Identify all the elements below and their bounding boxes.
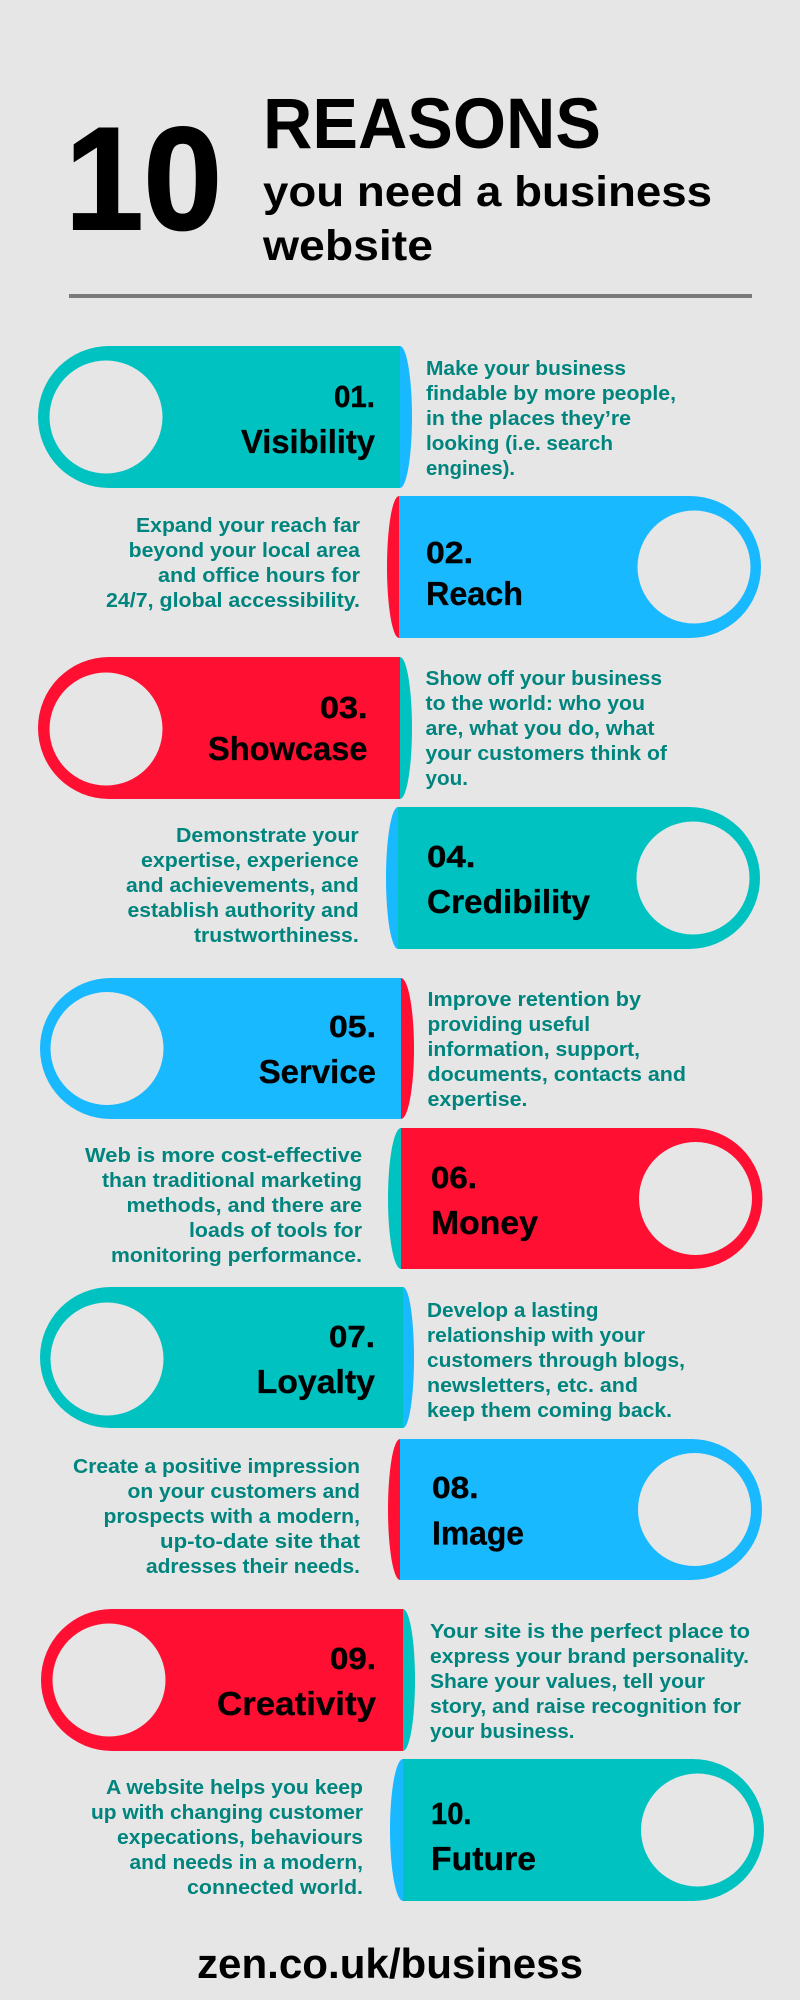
- panel: 08 Image: [388, 1439, 762, 1580]
- subheading line 2: website: [262, 223, 433, 270]
- text block: 08 description: [73, 1456, 360, 1578]
- text block: 04 description: Demonstrate your: [176, 825, 359, 847]
- text block: 10 description: connected world.: [187, 1877, 363, 1899]
- panel: 08 Image: 08.: [432, 1470, 479, 1505]
- text block: 07 description: newsletters, etc. and: [427, 1375, 638, 1397]
- panel: 06 Money: [388, 1128, 762, 1269]
- panel: 01 Visibility: [38, 346, 412, 488]
- text block: 02 description: beyond your local area: [129, 540, 361, 562]
- panel: 07 Loyalty: 07.: [329, 1319, 375, 1354]
- panel: 09 Creativity: 09.: [330, 1641, 376, 1676]
- text block: 10 description: and needs in a modern,: [130, 1852, 363, 1874]
- big number 10: 10: [65, 97, 222, 260]
- panel: 04 Credibility: [386, 807, 760, 949]
- text block: 08 description: prospects with a modern,: [104, 1506, 360, 1528]
- text block: 04 description: trustworthiness.: [194, 925, 359, 947]
- panel: 04 Credibility: 04.: [427, 839, 476, 874]
- text block: 05 description: [428, 989, 686, 1111]
- text block: 07 description: keep them coming back.: [427, 1400, 672, 1422]
- panel: 04 Credibility: Credibility: [427, 884, 590, 921]
- text block: 01 description: engines).: [426, 458, 515, 480]
- text block: 02 description: 24/7, global accessibility.: [106, 590, 360, 612]
- title block: [65, 85, 712, 270]
- panel: 09 Creativity: Creativity: [217, 1686, 376, 1723]
- heading: REASONS: REASONS: [263, 85, 601, 164]
- text block: 03 description: Show off your business: [426, 668, 662, 690]
- text block: 06 description: loads of tools for: [189, 1220, 362, 1242]
- text block: 07 description: customers through blogs,: [427, 1350, 685, 1372]
- panel: 05 Service: 05.: [329, 1009, 376, 1044]
- panel: 02 Reach: 02.: [426, 535, 473, 570]
- panel: 07 Loyalty: Loyalty: [257, 1364, 375, 1401]
- text block: 08 description: adresses their needs.: [146, 1556, 360, 1578]
- text block: 07 description: relationship with your: [427, 1325, 645, 1347]
- panel: 01 Visibility: Visibility: [241, 424, 375, 461]
- panel: 08 Image: Image: [432, 1516, 524, 1552]
- panel: 03 Showcase: 03.: [320, 690, 368, 725]
- text block: 06 description: [85, 1145, 362, 1267]
- text block: 09 description: Share your values, tell your: [430, 1671, 705, 1693]
- text block: 01 description: Make your business: [426, 358, 626, 380]
- text block: 03 description: to the world: who you: [426, 693, 645, 715]
- text block: 06 description: methods, and there are: [126, 1195, 362, 1217]
- text block: 10 description: [91, 1777, 363, 1899]
- text block: 03 description: you.: [426, 768, 468, 790]
- text block: 09 description: story, and raise recognition for: [430, 1696, 741, 1718]
- panel: 02 Reach: Reach: [426, 576, 523, 613]
- panel: 06 Money: Money: [431, 1205, 538, 1242]
- text block: 08 description: Create a positive impression: [73, 1456, 360, 1478]
- text block: 10 description: expecations, behaviours: [117, 1827, 363, 1849]
- panel: 05 Service: Service: [259, 1054, 376, 1091]
- divider rule: [69, 294, 752, 298]
- text block: 08 description: up-to-date site that: [160, 1531, 360, 1553]
- text block: 03 description: are, what you do, what: [426, 718, 655, 740]
- text block: 04 description: and achievements, and: [126, 875, 359, 897]
- panel: 09 Creativity: [41, 1609, 415, 1751]
- text block: 05 description: expertise.: [428, 1089, 528, 1111]
- panel: 03 Showcase: Showcase: [208, 731, 368, 768]
- text block: 01 description: findable by more people,: [426, 383, 676, 405]
- text block: 07 description: [427, 1300, 685, 1422]
- text block: 10 description: up with changing customer: [91, 1802, 363, 1824]
- panel: 02 Reach: [387, 496, 761, 638]
- text block: 09 description: [430, 1621, 750, 1743]
- text block: 02 description: and office hours for: [158, 565, 360, 587]
- panel: 05 Service: [40, 978, 414, 1119]
- text block: 04 description: [126, 825, 359, 947]
- panel: 07 Loyalty: [40, 1287, 414, 1428]
- text block: 04 description: establish authority and: [128, 900, 359, 922]
- text block: 05 description: documents, contacts and: [428, 1064, 686, 1086]
- text block: 05 description: providing useful: [428, 1014, 590, 1036]
- text block: 10 description: A website helps you keep: [106, 1777, 363, 1799]
- subheading line 1: you need a business: [263, 169, 712, 216]
- text block: 06 description: than traditional marketing: [102, 1170, 362, 1192]
- text block: 07 description: Develop a lasting: [427, 1300, 598, 1322]
- text block: 05 description: Improve retention by: [428, 989, 642, 1011]
- text block: 03 description: your customers think of: [426, 743, 667, 765]
- text block: 06 description: Web is more cost-effective: [85, 1145, 362, 1167]
- text block: 01 description: in the places they’re: [426, 408, 631, 430]
- text block: 09 description: express your brand personality.: [430, 1646, 749, 1668]
- text block: 04 description: expertise, experience: [141, 850, 359, 872]
- footer URL: zen.co.uk/business: [197, 1940, 583, 1987]
- text block: 08 description: on your customers and: [128, 1481, 360, 1503]
- panel: 06 Money: 06.: [431, 1160, 477, 1195]
- text block: 09 description: Your site is the perfect place to: [430, 1621, 750, 1643]
- text block: 05 description: information, support,: [428, 1039, 640, 1061]
- text block: 01 description: [426, 358, 676, 480]
- panel: 01 Visibility: 01.: [334, 379, 375, 414]
- text block: 03 description: [426, 668, 667, 790]
- text block: 02 description: Expand your reach far: [136, 515, 360, 537]
- panel: 10 Future: 10.: [431, 1796, 472, 1831]
- text block: 06 description: monitoring performance.: [111, 1245, 362, 1267]
- panel: 10 Future: [390, 1759, 764, 1901]
- text block: 01 description: looking (i.e. search: [426, 433, 613, 455]
- text block: 09 description: your business.: [430, 1721, 574, 1743]
- panel: 10 Future: Future: [431, 1841, 536, 1878]
- text block: 02 description: [106, 515, 361, 612]
- panel: 03 Showcase: [38, 657, 412, 799]
